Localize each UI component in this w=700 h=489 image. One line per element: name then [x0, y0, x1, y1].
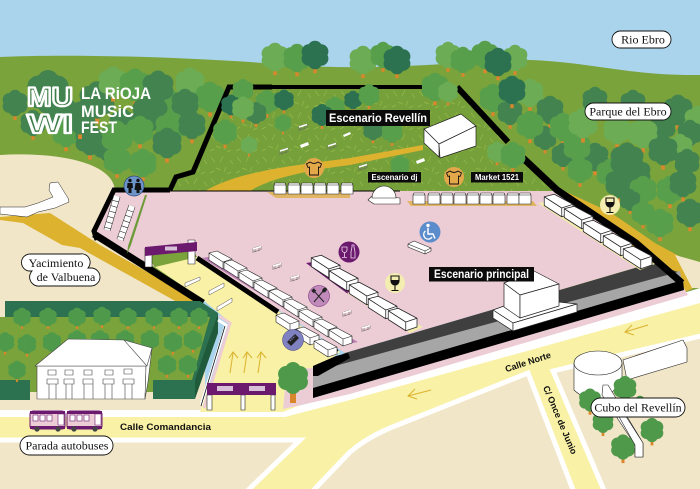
- label: Yacimiento de Valbuena: [22, 254, 100, 286]
- arrows: entrance: [229, 352, 266, 373]
- pink path around park hedge: [204, 316, 230, 408]
- gold path in grass: [205, 145, 423, 191]
- arch: upper entrance: [145, 240, 197, 267]
- road name: Calle Comandancia: Calle Comandancia: [120, 422, 212, 432]
- bus 2: [67, 411, 102, 432]
- stalls: row A: [209, 251, 352, 346]
- grass enclosure: [170, 88, 558, 191]
- grey service strip: [313, 271, 683, 398]
- yellow strip row B: [347, 291, 423, 333]
- label: Río Ebro: [612, 31, 671, 48]
- label: Parque del Ebro: Parque del Ebro: [589, 104, 667, 118]
- icon: restrooms: [124, 176, 144, 196]
- logo mark: MUWI: WI: [27, 109, 73, 139]
- background: green hill: [0, 56, 700, 300]
- stalls: left top row: [274, 183, 353, 194]
- label: Parada autobuses: Parada autobuses: [26, 438, 109, 452]
- roads: yellow surface: [0, 303, 700, 489]
- black line around park hedge: [201, 326, 225, 406]
- label: Market 1521: Market 1521: [475, 173, 520, 182]
- trees: back row: [262, 41, 527, 80]
- stage: Escenario Revellín: [424, 114, 476, 158]
- dark edge of grey strip: [313, 263, 678, 372]
- stalls: west columns: [107, 196, 132, 240]
- road name: C/ Once de Junio: C/ Once de Junio: [541, 384, 579, 456]
- stage: Escenario principal: [493, 271, 577, 331]
- icon: ticket: [282, 330, 304, 350]
- icon: t-shirt merch 2: [444, 167, 464, 187]
- trees around Cubo: [579, 376, 663, 463]
- white path around park hedge: [201, 320, 226, 405]
- lilac strip row A: [202, 257, 358, 345]
- icon: food: [308, 286, 330, 306]
- label: Río Ebro: Rio Ebro: [621, 32, 665, 46]
- city block south-west: [0, 440, 300, 489]
- park with hedge: [0, 301, 218, 400]
- logo wordmark: LA RiOJA: [81, 84, 151, 103]
- beige corner: [675, 255, 700, 288]
- park lawn: [0, 317, 210, 392]
- city block south-centre: [309, 373, 575, 489]
- tan strip left: [267, 192, 350, 198]
- black end block: [313, 353, 350, 376]
- entrance yellow area: [155, 257, 340, 412]
- pink festival ground: [96, 191, 655, 353]
- icon: wine centre: [385, 273, 405, 293]
- label: Yacimiento de Valbuena: de Valbuena: [37, 270, 96, 284]
- wall front of trees: [618, 415, 643, 457]
- arrows: Calle Norte: [408, 325, 648, 399]
- tan strip market: [407, 201, 537, 206]
- logo mark: MUWI: MU: [27, 82, 73, 112]
- small stall near accessibility point: [408, 241, 431, 254]
- ruined wall: [0, 182, 69, 217]
- trees inside enclosure: [213, 73, 525, 178]
- small white tables on grass: [300, 132, 425, 164]
- bus 1: [30, 411, 65, 432]
- building: house: [35, 339, 152, 399]
- road name: Calle Norte: Calle Norte: [504, 350, 552, 374]
- black fence: [94, 87, 682, 352]
- roads: white edge: [0, 288, 700, 489]
- label: Cubo del Revellín: [591, 398, 685, 417]
- stalls: ticket row: [276, 313, 337, 357]
- yellow strip row F: [538, 202, 655, 270]
- logo: [27, 82, 151, 139]
- green hatch strip west: [127, 195, 147, 254]
- seating groups: [253, 124, 370, 332]
- label: Parada autobuses: [20, 436, 113, 455]
- city block south-east: [553, 335, 700, 489]
- entrance barriers: [185, 277, 232, 311]
- grass hatch texture: [170, 88, 558, 191]
- icon: t-shirt merch 1: [304, 158, 324, 178]
- black band along south fence: [313, 280, 684, 398]
- ground: beige area left: [0, 154, 205, 412]
- stalls: row F: [544, 194, 652, 269]
- stage: Escenario dj: [368, 186, 400, 204]
- label: Escenario principal: Escenario principal: [434, 269, 529, 281]
- arch: lower entrance: [207, 383, 276, 410]
- label: Escenario Revellín: Escenario Revellín: [329, 111, 427, 125]
- icon: bottles: [338, 242, 360, 262]
- park trees: [0, 307, 208, 382]
- icon: wine right: [600, 195, 620, 215]
- hedge back: [0, 301, 218, 382]
- label: Cubo del Revellín: Cubo del Revellín: [594, 400, 682, 414]
- gold path right: [562, 190, 700, 292]
- trees: left cluster: [3, 67, 224, 181]
- pink strip along road: [283, 288, 688, 409]
- stalls: market row: [413, 193, 531, 204]
- hedge front left: [0, 380, 30, 400]
- purple strip row B: [306, 262, 350, 294]
- logo wordmark: [81, 84, 151, 137]
- icon: wheelchair: [420, 222, 440, 242]
- logo wordmark: FEST: [81, 118, 118, 137]
- Cubo del Revellín building: [574, 340, 687, 457]
- logo wordmark: MUSiC: [81, 102, 134, 121]
- entrance tree: [278, 362, 308, 403]
- stall strips: [202, 192, 655, 345]
- stalls: row B: [311, 255, 417, 331]
- buses: [30, 411, 102, 432]
- hedge front right: [153, 380, 195, 399]
- label: Yacimiento de Valbuena: Yacimiento: [29, 256, 83, 270]
- hedge right side: [195, 313, 218, 399]
- trees: right cluster: [480, 76, 700, 241]
- label: Escenario dj: Escenario dj: [372, 173, 418, 182]
- gold path left: [0, 213, 200, 302]
- logo mark: MUWI: [27, 82, 73, 139]
